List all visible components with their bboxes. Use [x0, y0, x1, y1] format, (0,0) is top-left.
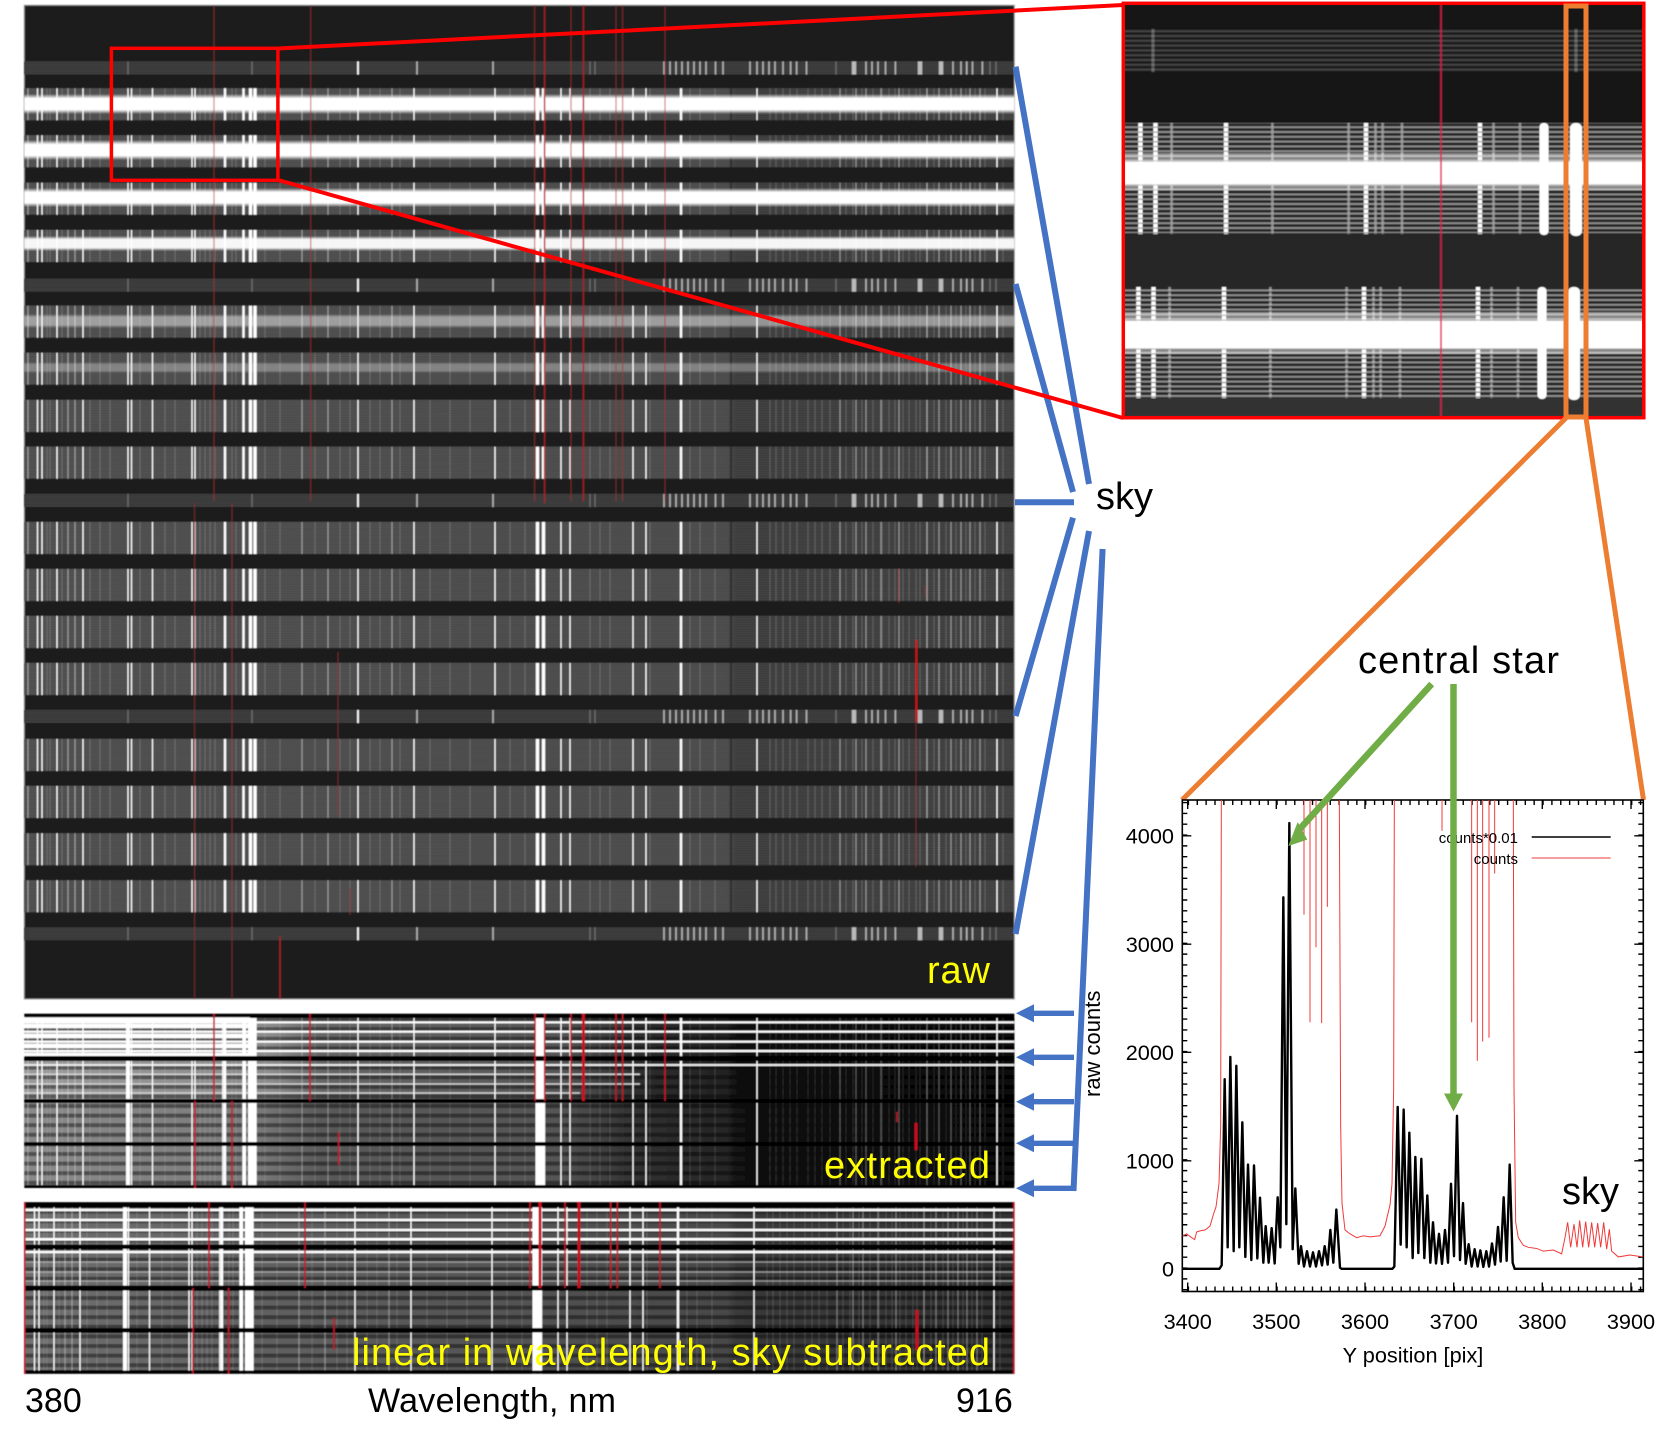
arrows: raw counts to extracted panel [1016, 1004, 1074, 1197]
y axis labels [1126, 824, 1174, 1282]
label: extracted: extracted [824, 1145, 990, 1187]
arrowhead: left peak [1288, 822, 1307, 846]
label: central star: central star [1358, 640, 1559, 682]
panel: linear wavelength sky-subtracted spectra [24, 1202, 1014, 1374]
inset border: red [1123, 3, 1644, 418]
x axis labels: 3900 [1607, 1309, 1655, 1334]
y axis labels: 1000 [1126, 1148, 1174, 1174]
callout lines: sky fibres [1015, 67, 1103, 1191]
zoom box: red in raw panel [111, 48, 278, 180]
axis title: wavelength: Wavelength, nm [368, 1382, 616, 1420]
x axis labels: 3700 [1430, 1309, 1478, 1334]
label: raw: raw [927, 950, 991, 992]
label: sky: sky [1096, 476, 1153, 518]
panel: raw spectra [24, 5, 1014, 999]
black counts curve [1183, 823, 1643, 1269]
label: linear in wavelength, sky subtracted: linear in wavelength, sky subtracted [352, 1332, 990, 1374]
legend: counts [1474, 851, 1518, 868]
legend [1439, 830, 1611, 868]
y axis labels: 0 [1162, 1256, 1174, 1282]
x axis labels: 3800 [1518, 1309, 1566, 1334]
chart: counts vs Y position [1126, 800, 1655, 1368]
arrowhead: right peak [1444, 1094, 1463, 1112]
y axis labels: 3000 [1126, 932, 1174, 957]
arrow: central star to left peak [1297, 684, 1432, 832]
panel: extracted spectra [24, 1014, 1014, 1188]
red counts curve [1183, 800, 1643, 1257]
label: raw counts: raw counts [1080, 991, 1105, 1097]
x axis labels: 3600 [1341, 1309, 1389, 1334]
zoom lines: red [278, 5, 1123, 418]
panel: zoomed inset [1123, 3, 1644, 418]
axis label: 916: 916 [956, 1382, 1013, 1420]
arrow: central star to right peak [1450, 684, 1457, 1095]
zoom box: orange in inset [1566, 6, 1586, 417]
y axis labels: 4000 [1126, 824, 1174, 848]
legend: counts*0.01 [1439, 830, 1518, 847]
x axis labels: 3500 [1252, 1309, 1300, 1334]
axis label: 380: 380 [25, 1382, 82, 1420]
x axis title: Y position [pix] [1343, 1342, 1483, 1368]
x axis labels: 3400 [1164, 1309, 1212, 1334]
x axis labels [1164, 1309, 1655, 1334]
chart ticks [1182, 800, 1643, 1292]
label: sky in chart: sky [1562, 1171, 1619, 1213]
zoom lines: orange [1182, 418, 1644, 800]
y axis labels: 2000 [1126, 1040, 1174, 1065]
